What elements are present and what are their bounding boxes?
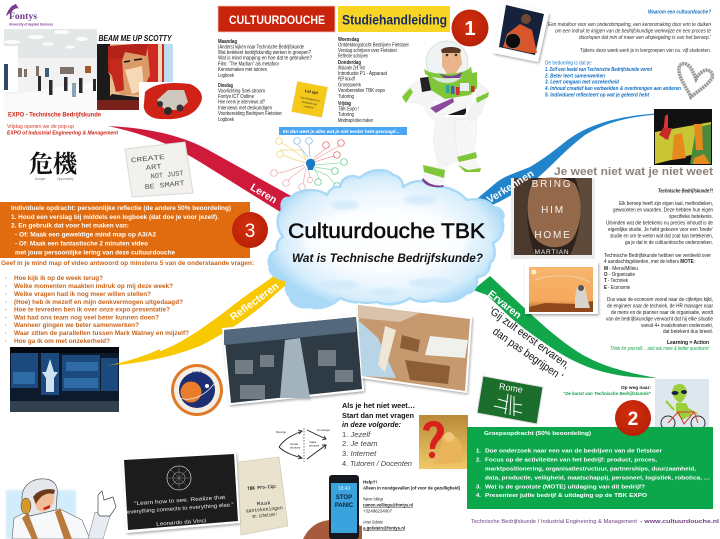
text: reflectievragen: · bbox=[5, 314, 7, 322]
text: De bedoeling: 3. Leert omgaan met onzekerheid bbox=[545, 80, 620, 86]
text: Op weg naar: “De kunst van Technische Bedrijfskunde” bbox=[563, 391, 652, 396]
panel: individuele opdracht: Individuele opdracht: persoonlijke reflectie (de andere 50% beoordeling) bbox=[11, 205, 231, 212]
title block: Studiehandleiding header: Studiehandleiding bbox=[342, 12, 447, 28]
text: reflectievragen bbox=[1, 260, 254, 345]
schedule: Woensdag to Vrijdag: Donderdag bbox=[338, 60, 361, 66]
text: reflectievragen: · bbox=[5, 306, 7, 314]
image: EXPO gallery collage bbox=[4, 29, 102, 119]
text: reflectievragen: Waar zitten de parallellen tussen Mark Watney en mijzelf? bbox=[14, 330, 189, 337]
text: Technische Bedrijfskunde explainer: T - Techniek bbox=[604, 278, 628, 284]
card: create art: ART bbox=[145, 163, 162, 173]
note: TBK pro-tip bbox=[238, 457, 288, 535]
text: reflectievragen: · bbox=[5, 338, 7, 345]
footer: credits and website: - www.cultuurdouche.nl bbox=[640, 519, 719, 525]
text: Technische Bedrijfskunde explainer: van de bedrijfskundige verwacht dat hij elke situatie bbox=[606, 316, 713, 322]
text: Help contacts: Annet Golstein bbox=[363, 520, 383, 524]
badge: 3 bbox=[232, 212, 268, 248]
text: reflectievragen: Hoe kijk ik op de week terug? bbox=[14, 275, 103, 282]
text: De bedoeling bbox=[544, 60, 681, 98]
text: De bedoeling: De bedoeling is dat je: bbox=[545, 60, 592, 66]
title block: Studiehandleiding header bbox=[338, 6, 450, 32]
image: red splatter with rover bbox=[139, 82, 202, 120]
panel: individuele opdracht: 1. Houd een verslag bij middels een logboek (dat doe je voor jezelf). bbox=[11, 214, 219, 221]
panel: groepsopdracht: Doe onderzoek naar een van de bedrijven van de fietstoer bbox=[485, 448, 663, 454]
schedule: Maandag and Dinsdag: Kennismaken met tutoren bbox=[218, 67, 267, 73]
text: reflectievragen: · bbox=[5, 299, 7, 306]
text: Op weg naar bbox=[563, 385, 652, 396]
image: Beam me up Scotty comic bbox=[97, 29, 173, 110]
banner: En dan weet je alles bbox=[279, 127, 407, 135]
panel: individuele opdracht: 2. En gebruik dat voor het maken van: bbox=[11, 222, 129, 230]
diagram: divergent convergent thinking: create bbox=[290, 442, 299, 446]
schedule: Woensdag to Vrijdag: Reflectie schrijven bbox=[338, 54, 368, 60]
text: Als je het niet weet: 1. Jezelf bbox=[342, 430, 371, 439]
image: smartphone stop panic bbox=[303, 475, 362, 539]
image: smartphone stop panic: 18:43 bbox=[338, 486, 350, 492]
text: Technische Bedrijfskunde explainer: ga je dat in de cultuurdouche onderzoeken. bbox=[625, 240, 713, 246]
schedule: Maandag and Dinsdag: Wat is mind mapping en hoe dat te gebruiken? bbox=[218, 56, 312, 62]
text: reflectievragen: Welke vragen had ik nog meer willen stellen? bbox=[14, 291, 151, 298]
cloud subtitle: Wat is Technische Bedrijfskunde? bbox=[292, 253, 483, 265]
schedule: Maandag and Dinsdag bbox=[218, 39, 312, 123]
badge: 3: 3 bbox=[245, 221, 255, 242]
card: create art: BE SMART bbox=[144, 180, 185, 192]
banner: En dan weet je alles: En dan weet je alles wat je niet eerder hebt gevraagd… bbox=[283, 129, 400, 135]
image: EXPO gallery collage: EXPO - Technische Bedrijfskunde bbox=[8, 112, 102, 118]
text: Technische Bedrijfskunde explainer: Uitvinden wat die betekenis nu precies inhoudt is de bbox=[606, 220, 713, 226]
poster: The Martian: HOME bbox=[534, 230, 572, 241]
image: alien on bicycle bbox=[655, 379, 709, 435]
text: Technische Bedrijfskunde explainer: Elk beroep heeft zijn eigen taal, methodieken, bbox=[619, 201, 713, 207]
title block: Cultuurdouche header bbox=[218, 6, 335, 32]
poster: The Martian: MARTIAN bbox=[535, 249, 569, 256]
text: Als je het niet weet bbox=[342, 401, 415, 468]
schedule: Maandag and Dinsdag: Dinsdag bbox=[218, 83, 233, 89]
panel: groepsopdracht: 3. bbox=[476, 484, 481, 490]
diagram: divergent convergent thinking: choices bbox=[290, 446, 301, 450]
poster: The Martian bbox=[511, 178, 595, 259]
panel: groepsopdracht: Focus op de activiteiten van het bedrijf: product, proces, bbox=[485, 458, 657, 464]
text: Als je het niet weet: 2. Je team bbox=[342, 439, 377, 448]
panel: groepsopdracht: Groepsopdracht (50% beoordeling) bbox=[484, 431, 591, 437]
cloud: central topic bbox=[269, 170, 504, 308]
badge: 2 bbox=[615, 400, 651, 436]
diagram: divergent convergent thinking: choices bbox=[309, 444, 320, 448]
text: Technische Bedrijfskunde explainer: specifieke betekenis. bbox=[669, 214, 713, 220]
text: Technische Bedrijfskunde explainer: dat betekent dus breed. bbox=[663, 329, 713, 335]
note: TBK pro-tip: en schetsen! bbox=[252, 512, 278, 520]
icon: scribbled heart bbox=[679, 64, 712, 97]
schedule: Maandag and Dinsdag: Maandag bbox=[218, 39, 237, 45]
footer: credits and website bbox=[471, 519, 719, 525]
text: expo pop-up note bbox=[7, 124, 118, 136]
panel: groepsopdracht: marktpositionering, organisatiestructuur, partnerships, duurzaamheid, bbox=[485, 466, 696, 472]
illustration: Buzz Lightyear bbox=[402, 41, 489, 187]
poster: The Martian: HIM bbox=[541, 205, 565, 216]
panel: groepsopdracht: data, productie, veiligheid, maatschappij, personeel, logistiek, robotica, … bbox=[485, 476, 710, 482]
schedule: Woensdag to Vrijdag bbox=[338, 37, 409, 124]
text: Technische Bedrijfskunde explainer: O - Organisatie bbox=[604, 272, 635, 278]
note: TBK pro-tip: TBK Pro-tip: bbox=[247, 484, 278, 492]
text: Technische Bedrijfskunde explainer: eigenlijke studie. Je hebt gekozen voor een ‘brede’ bbox=[608, 227, 713, 233]
branch: Leren (crimson) bbox=[108, 126, 293, 213]
image: mission patch bbox=[171, 364, 223, 416]
panel: individuele opdracht: - Of: Maak een geweldige mind map op A3/A2 bbox=[15, 232, 157, 238]
text: Als je het niet weet: Start dan met vragen bbox=[342, 411, 414, 420]
image: smartphone stop panic: STOP bbox=[336, 495, 352, 501]
panel: groepsopdracht: Presenteer jullie bedrijf & uitdaging op de TBK EXPO bbox=[485, 493, 647, 499]
schedule: Woensdag to Vrijdag: Ontdekkingstocht Bedrijven Fietstoer bbox=[338, 42, 409, 48]
text: De bedoeling: 1. Zelf een beeld van Technische Bedrijfskunde vormt bbox=[545, 67, 652, 73]
schedule: Maandag and Dinsdag: (Anders) kijken naar Technische Bedrijfskunde bbox=[218, 44, 304, 50]
note: TBK pro-tip: aantekeningen bbox=[246, 505, 283, 514]
text: Help contacts: Ramon Vullings bbox=[363, 496, 383, 502]
icon: crisis kanji: 危機 bbox=[29, 144, 79, 179]
branch label: Verkennen: Verkennen bbox=[485, 168, 536, 206]
text: Technische Bedrijfskunde explainer: de engineer naar de techniek, de HR manager naar bbox=[607, 304, 713, 310]
icon: crisis kanji: Danger bbox=[35, 177, 46, 181]
sign: Rome signpost: Rome bbox=[498, 381, 524, 395]
badge: 2: 2 bbox=[628, 409, 638, 430]
schedule: Woensdag to Vrijdag: Woensdag bbox=[338, 37, 359, 43]
panel: individuele opdracht: - Of: Maak een fantastische 2 minuten video bbox=[15, 240, 148, 248]
text: reflectievragen: · bbox=[5, 322, 7, 329]
logo: Fontys: University of Applied Sciences bbox=[9, 22, 53, 26]
photo: atrium interior bbox=[357, 303, 472, 393]
panel: groepsopdracht: 4. bbox=[476, 493, 481, 499]
image: LEGO Martian scene bbox=[525, 262, 598, 314]
photo: chalkboard Leonardo quote: “Learn how to see. Realize that bbox=[134, 495, 226, 507]
text: Als je het niet weet: Als je het niet weet… bbox=[342, 401, 415, 410]
schedule: Woensdag to Vrijdag: Mindmap/video maken bbox=[338, 118, 373, 124]
photo: chalkboard Leonardo quote: everything connects to everything else.” bbox=[127, 502, 234, 516]
image: Tintin on the moon bbox=[654, 109, 712, 165]
text: reflectievragen: Welke momenten maakten indruk op mij deze week? bbox=[14, 283, 173, 290]
text: reflectievragen: · bbox=[5, 283, 7, 290]
text: reflectievragen: Geef in je mind map of video antwoord op minstens 5 van de onderstaande vragen: bbox=[1, 260, 254, 267]
panel: groepsopdracht bbox=[467, 427, 713, 509]
sticky note: Let op: Aanwezigheid en bbox=[300, 95, 321, 103]
text: reflectievragen: Wanneer gingen we beter samenwerken? bbox=[14, 322, 139, 329]
schedule: Woensdag to Vrijdag: Vrijdag bbox=[338, 101, 351, 107]
text: reflectievragen: Hoe ga ik om met onzekerheid? bbox=[14, 338, 110, 345]
text: Technische Bedrijfskunde explainer bbox=[604, 188, 714, 352]
branch label: Leren: Leren bbox=[248, 181, 279, 206]
branch: Ervaren (green) bbox=[473, 276, 657, 378]
diagram: divergent convergent thinking: Converge bbox=[317, 428, 330, 432]
sign: Rome signpost bbox=[477, 376, 543, 424]
image: mission patch: ARES bbox=[191, 370, 203, 375]
text: Help contacts bbox=[363, 480, 461, 530]
text: Als je het niet weet: in deze volgorde: bbox=[342, 420, 401, 429]
schedule: Woensdag to Vrijdag: Tutoring bbox=[338, 94, 354, 100]
text: Technische Bedrijfskunde explainer: vanuit 4+ invalshoeken onderzoekt, bbox=[641, 323, 713, 329]
text: Als je het niet weet: 4. Tutoren / Docenten bbox=[342, 459, 412, 468]
badge: 1: 1 bbox=[464, 18, 476, 40]
photo: chalkboard Leonardo quote bbox=[122, 452, 240, 533]
image: smartphone stop panic: PANIC bbox=[335, 503, 354, 509]
schedule: Woensdag to Vrijdag: Groepswerk bbox=[338, 82, 361, 88]
schedule: Woensdag to Vrijdag: PEP kick-off bbox=[338, 77, 355, 83]
text: Technische Bedrijfskunde explainer: M - Mens/Milieu bbox=[604, 266, 638, 272]
text: Als je het niet weet: 3. Internet bbox=[342, 449, 377, 458]
icon: mind map tree bbox=[271, 138, 347, 190]
schedule: Woensdag to Vrijdag: Voorbereiden TBK expo bbox=[338, 88, 385, 94]
branch label: Ervaren: Ervaren bbox=[485, 288, 523, 322]
panel: groepsopdracht: 2. bbox=[476, 458, 481, 464]
branch: Verkennen (blue) bbox=[472, 113, 664, 206]
text: reflectievragen: · bbox=[5, 275, 7, 282]
text: Technische Bedrijfskunde explainer: 4 aandachtsgebieden, met de letters MOTE: bbox=[604, 259, 695, 265]
handwritten quote: Gij zult eerst ervaren: dan pas begrijpen ‘ bbox=[490, 326, 565, 383]
logo: Fontys bbox=[6, 4, 53, 26]
text: Help contacts: a.golstein@fontys.nl bbox=[363, 526, 405, 530]
text: Op weg naar: Op weg naar: bbox=[621, 385, 651, 390]
sticky note: Let op: deelname zijn bbox=[301, 99, 318, 107]
schedule: Maandag and Dinsdag: Logboek bbox=[218, 117, 234, 123]
schedule: Woensdag to Vrijdag: Wiskunde Zelf Test bbox=[338, 65, 365, 71]
note: TBK pro-tip: Maak bbox=[257, 500, 271, 507]
text: expo pop-up note: EXPO of Industrial Engineering & Management bbox=[7, 130, 118, 136]
photo: factory hall bbox=[222, 315, 364, 405]
text: Help contacts: Alleen in noodgevallen (of voor de gezelligheid) bbox=[363, 486, 461, 490]
text: De bedoeling: 5. Individueel reflecteert op wat je geleerd hebt bbox=[545, 92, 649, 98]
text: Waarom een cultuurdouche bbox=[547, 10, 712, 54]
panel: individuele opdracht: met jouw persoonlijke lering van deze cultuurdouche bbox=[15, 250, 175, 256]
text: reflectievragen: · bbox=[5, 291, 7, 298]
image: woman astronaut thumbs up bbox=[6, 479, 116, 539]
schedule: Maandag and Dinsdag: Logboek bbox=[218, 73, 234, 79]
badge: 1 bbox=[452, 10, 488, 46]
branch label: Reflecteren: Reflecteren bbox=[228, 280, 281, 323]
text: De bedoeling: 4. Inhoud creatief kan verbeelden & overbrengen aan anderen bbox=[544, 86, 681, 92]
text: De bedoeling: 2. Beter leert samenwerken bbox=[544, 74, 605, 80]
schedule: Woensdag to Vrijdag: Introductie P1 - Apparaat bbox=[338, 71, 387, 77]
text: Technische Bedrijfskunde explainer: Technische Bedrijfskunde hebben we verdeeld over bbox=[604, 253, 711, 259]
diagram: divergent convergent thinking: make bbox=[309, 440, 317, 444]
text: Waarom een cultuurdouche: Waarom een cultuurdouche? bbox=[648, 10, 712, 16]
text: Technische Bedrijfskunde explainer: gewoonten en waarden. Deze hebben hun eigen bbox=[613, 208, 713, 214]
branch tip overlay: yellow over control room bbox=[107, 349, 160, 366]
text: Help contacts: ramon.vullings@fontys.nl bbox=[363, 502, 413, 508]
diagram: divergent convergent thinking: Diverge bbox=[276, 430, 287, 434]
icon: crisis kanji: Opportunity bbox=[57, 177, 74, 181]
text: reflectievragen: · bbox=[5, 330, 7, 337]
text: expo pop-up note: Vrijdag openen we de pop-up bbox=[7, 124, 74, 130]
footer: credits and website: Technische Bedrijfskunde / Industrial Engineering & Management bbox=[471, 519, 637, 525]
sticky note: Let op: verplicht! bbox=[303, 104, 314, 110]
text: reflectievragen: Wat had ons team nog veel beter kunnen doen? bbox=[14, 314, 159, 322]
image: mission control room bbox=[10, 347, 119, 412]
panel: groepsopdracht: 1. bbox=[476, 448, 481, 454]
text: Technische Bedrijfskunde explainer: Learning = Action bbox=[667, 340, 709, 346]
sticky note: Let op: Let op! bbox=[305, 88, 319, 95]
logo: Fontys: Fontys bbox=[9, 11, 38, 21]
branch: Reflecteren (yellow) bbox=[107, 272, 294, 366]
text: Technische Bedrijfskunde explainer: E - Economie bbox=[604, 285, 630, 291]
text: reflectievragen: Hoe te tevreden ben ik over onze expo presentatie? bbox=[14, 306, 170, 314]
photo: chalkboard Leonardo quote: Leonardo da Vinci bbox=[156, 518, 206, 528]
cloud title: Cultuurdouche TBK bbox=[288, 220, 485, 243]
handwritten quote: Gij zult eerst ervaren: ‘Gij zult eerst ervaren, bbox=[486, 305, 572, 371]
heading: Je weet niet wat je niet weet: Je weet niet wat je niet weet bbox=[554, 166, 713, 178]
schedule: Woensdag to Vrijdag: Verslag schrijven over Fietstoer bbox=[338, 48, 397, 54]
poster: The Martian: BRING bbox=[532, 179, 572, 190]
card: create art: CREATE bbox=[131, 154, 165, 165]
schedule: Maandag and Dinsdag: Interviews met deskundigen bbox=[218, 105, 272, 111]
card: create art bbox=[125, 142, 193, 197]
image: question mark figure bbox=[419, 415, 468, 469]
panel: individuele opdracht bbox=[0, 202, 250, 258]
text: Waarom een cultuurdouche: doorlopen dat min of meer een afspiegeling is van het beroep.’ bbox=[579, 35, 712, 41]
panel: groepsopdracht: Wat is de grootste (MOTE) uitdaging van dit bedrijf? bbox=[485, 484, 645, 490]
schedule: Maandag and Dinsdag: Wat betekent bedrijfskundig werken in groepen? bbox=[218, 50, 311, 56]
schedule: Maandag and Dinsdag: Voorlichting Snel-stroom bbox=[218, 88, 265, 94]
card: create art: NOT JUST bbox=[150, 170, 184, 181]
text: Help contacts: Help?! bbox=[363, 480, 377, 484]
schedule: Woensdag to Vrijdag: TBK Expo ! bbox=[338, 106, 359, 112]
schedule: Woensdag to Vrijdag: Tutoring bbox=[338, 112, 354, 118]
sticky note: Let op bbox=[291, 81, 328, 118]
text: Help contacts: +32496234007 bbox=[363, 508, 393, 514]
photo: astronaut polaroid bbox=[493, 1, 549, 62]
text: reflectievragen: (Hoe) heb ik mezelf en mijn denkvermogen uitgedaagd? bbox=[14, 299, 183, 306]
schedule: Maandag and Dinsdag: Voorbereiding Bedrijven Fietstoer bbox=[218, 111, 282, 117]
schedule: Maandag and Dinsdag: Hoe neem je interviews af? bbox=[218, 100, 265, 106]
schedule: Maandag and Dinsdag: Film: “The Martian” als metafoor bbox=[218, 61, 279, 67]
schedule: Maandag and Dinsdag: Fontys ICT Outline bbox=[218, 94, 254, 100]
title block: Cultuurdouche header: CULTUURDOUCHE bbox=[229, 15, 325, 27]
diagram: divergent convergent thinking bbox=[276, 428, 330, 462]
image: Beam me up Scotty comic: BEAM ME UP SCOTTY bbox=[98, 34, 172, 43]
